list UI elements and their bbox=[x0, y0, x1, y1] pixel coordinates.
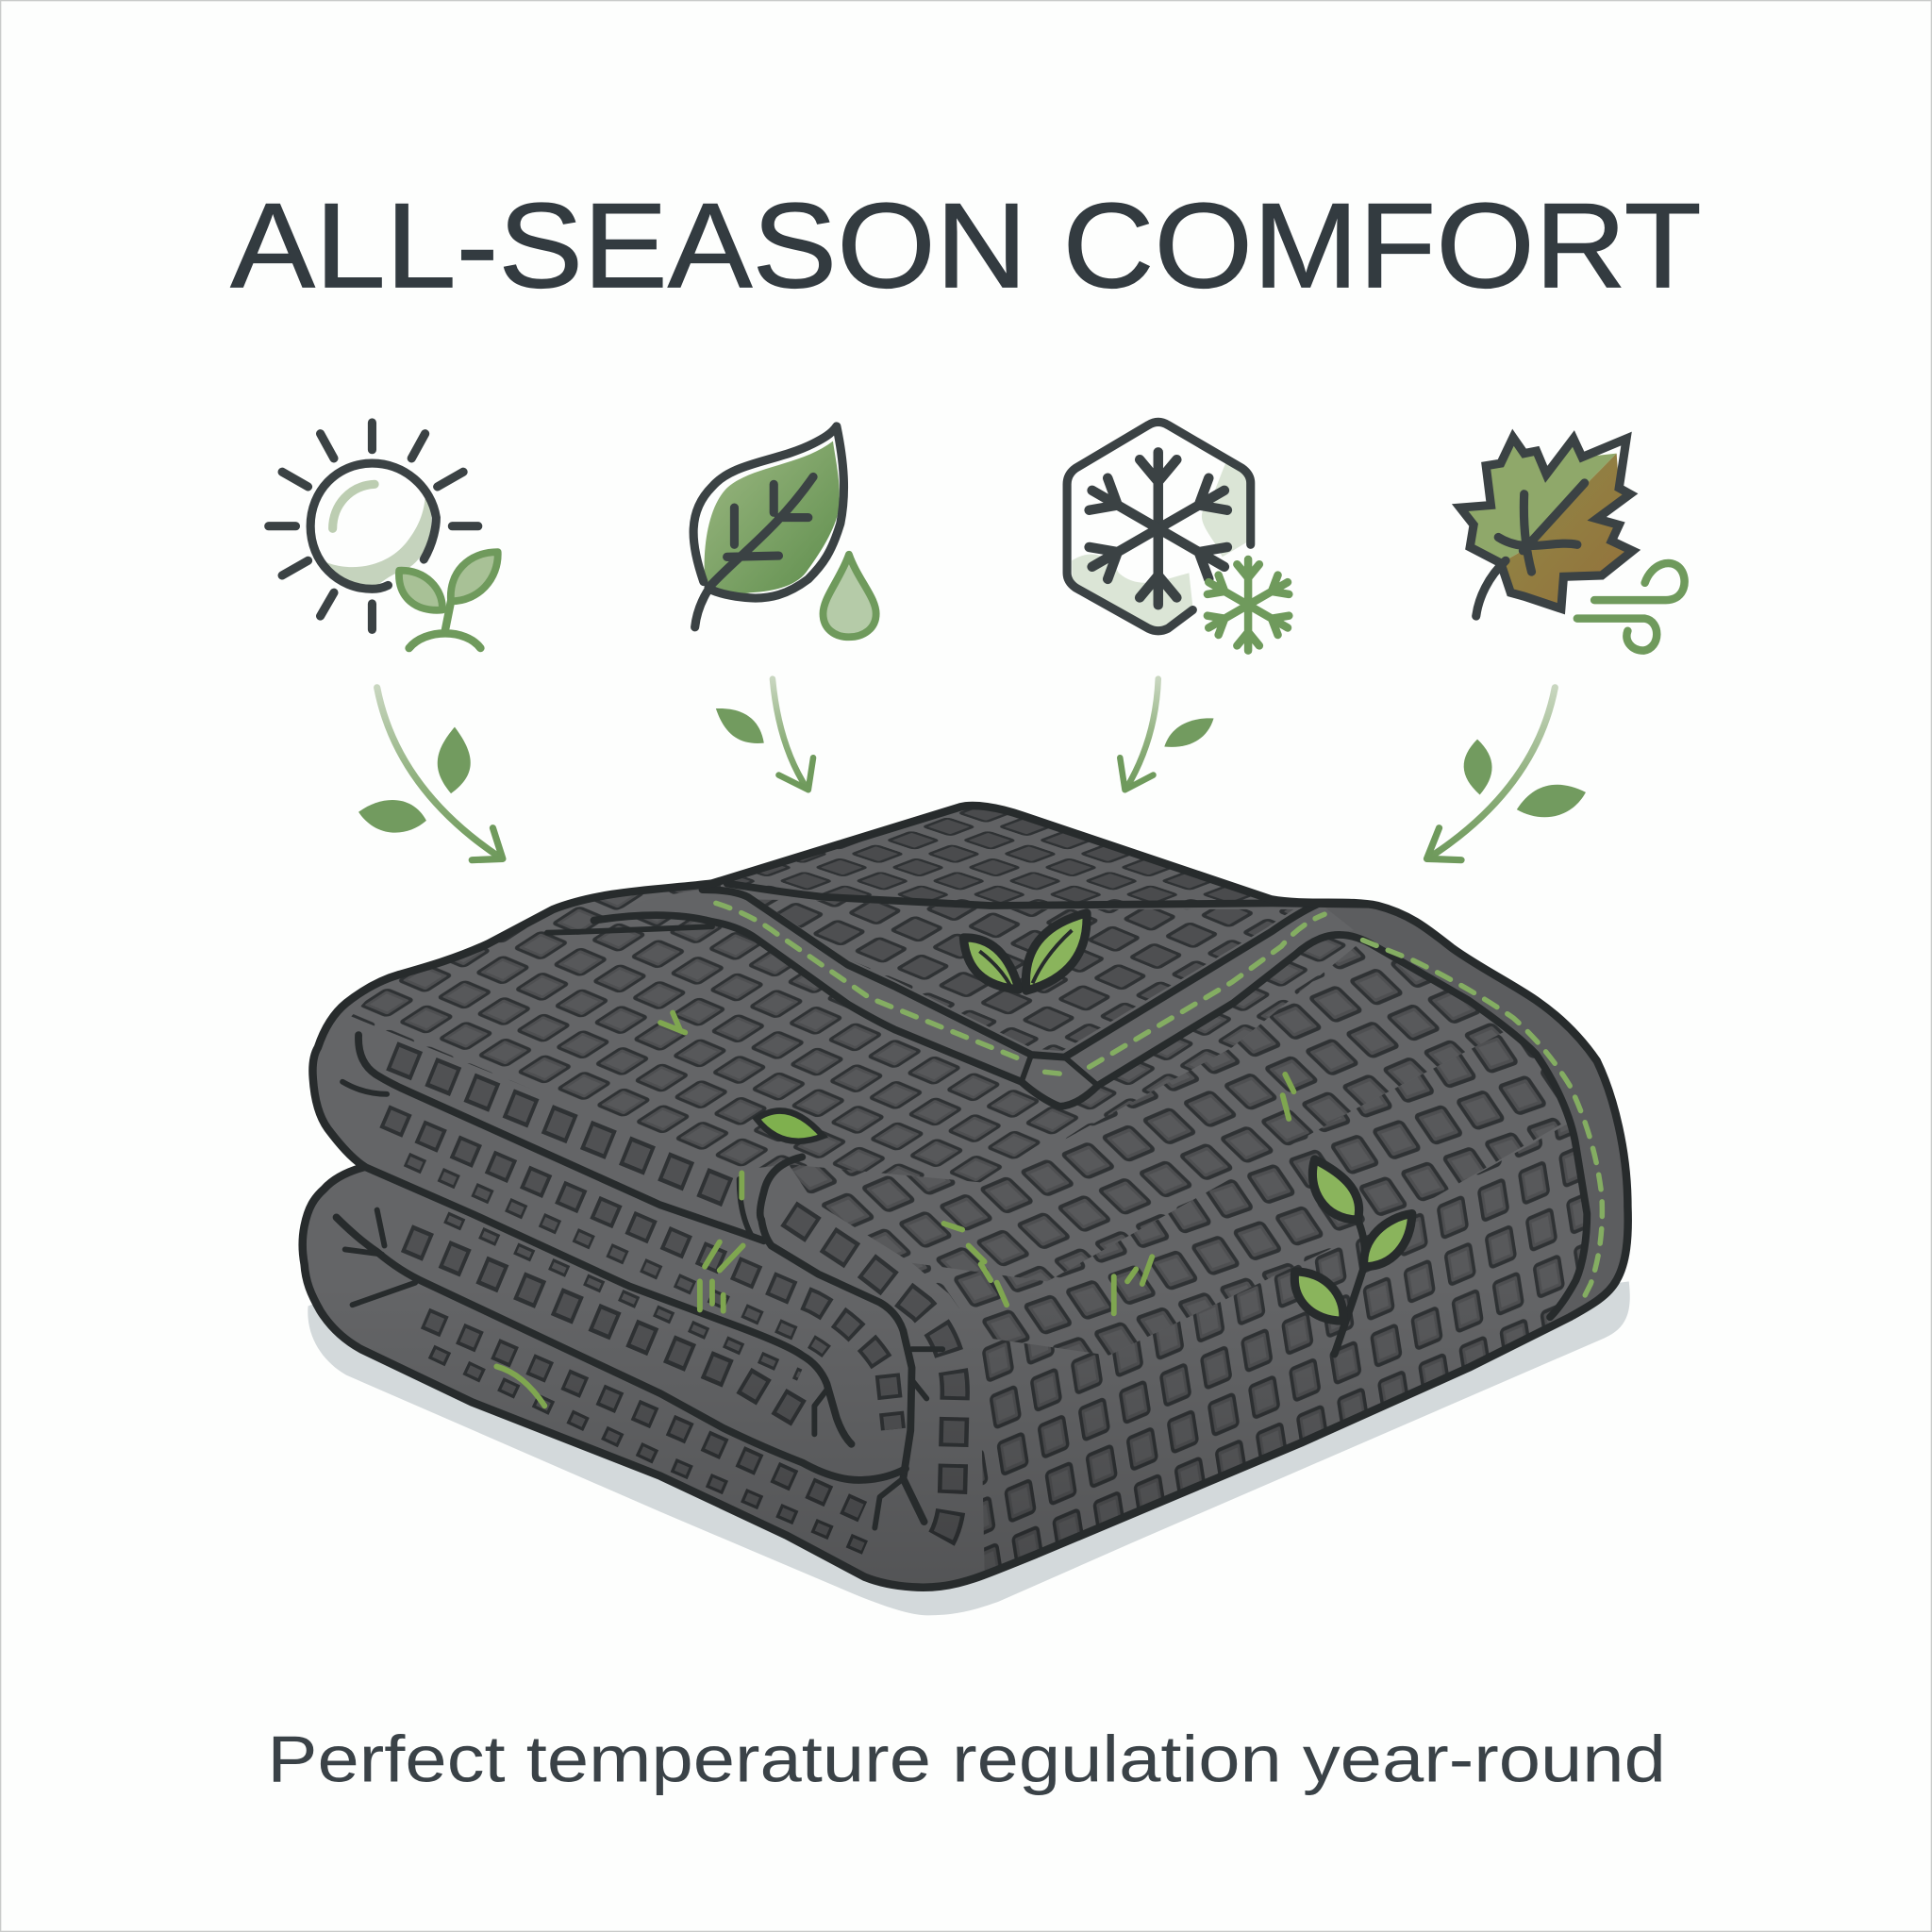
drifting leaf bbox=[438, 727, 471, 793]
drifting leaf bbox=[1164, 718, 1214, 747]
title: ALL-SEASON COMFORT bbox=[230, 178, 1702, 313]
arrow 1: sun to blanket bbox=[358, 688, 503, 860]
hexagon outline bbox=[1067, 422, 1251, 631]
large snowflake bbox=[1083, 452, 1234, 605]
floor shadow bbox=[308, 1281, 1630, 1615]
hexagon tint bbox=[1072, 462, 1247, 629]
blanket fold lines bbox=[337, 883, 1587, 1528]
drifting leaf bbox=[1464, 740, 1492, 794]
small leaf on top surface bbox=[757, 1110, 823, 1141]
sun outline bbox=[310, 463, 436, 589]
icon: autumn maple leaf with wind bbox=[1460, 438, 1685, 651]
icon: spring leaf with water drop bbox=[693, 426, 876, 637]
leaf green fill bbox=[705, 441, 840, 593]
right hem panel bbox=[1328, 908, 1606, 1315]
flap hem band bbox=[594, 890, 1354, 1107]
arrow 2: leaf to blanket bbox=[716, 679, 813, 790]
water drop bbox=[823, 555, 876, 637]
maple leaf brown half bbox=[1501, 454, 1633, 608]
waffle surface bbox=[351, 885, 1583, 1583]
sun crescent shade bbox=[313, 487, 431, 588]
roll seam cells bbox=[789, 1214, 955, 1546]
front flap panel bbox=[727, 887, 1320, 1058]
arrow 4: maple leaf to blanket bbox=[1426, 688, 1586, 860]
stitching on hems bbox=[716, 903, 1602, 1304]
blanket outline bbox=[303, 806, 1628, 1588]
flap leaf emblem bbox=[963, 913, 1087, 991]
left fold cell rows bbox=[385, 1056, 893, 1547]
sun highlight bbox=[333, 484, 375, 528]
small green snowflake bbox=[1203, 559, 1293, 651]
arrow 3: snowflake to blanket bbox=[1120, 679, 1214, 790]
drifting leaf bbox=[716, 708, 764, 743]
maple leaf green half bbox=[1460, 438, 1617, 563]
maple veins and stem bbox=[1476, 483, 1585, 616]
green flecks bbox=[496, 1013, 1293, 1406]
wind lines bbox=[1577, 563, 1685, 651]
drifting leaf bbox=[1517, 785, 1586, 817]
leaf outline bbox=[693, 426, 843, 627]
green sprig bbox=[1294, 1159, 1412, 1354]
icon: summer sun with sprout bbox=[269, 423, 498, 648]
subtitle: Perfect temperature regulation year-round bbox=[267, 1723, 1666, 1796]
sprout bbox=[399, 552, 498, 648]
icon: winter snowflake hexagon bbox=[1067, 422, 1293, 651]
maple leaf outline bbox=[1460, 438, 1633, 608]
drifting leaf bbox=[358, 800, 426, 833]
leaf veins bbox=[708, 476, 813, 588]
lower shading bbox=[568, 1436, 1299, 1583]
folded waffle blanket bbox=[295, 789, 1663, 1651]
back flap panel bbox=[727, 806, 1272, 906]
blanket body bbox=[303, 806, 1628, 1588]
sun rays bbox=[269, 423, 478, 629]
